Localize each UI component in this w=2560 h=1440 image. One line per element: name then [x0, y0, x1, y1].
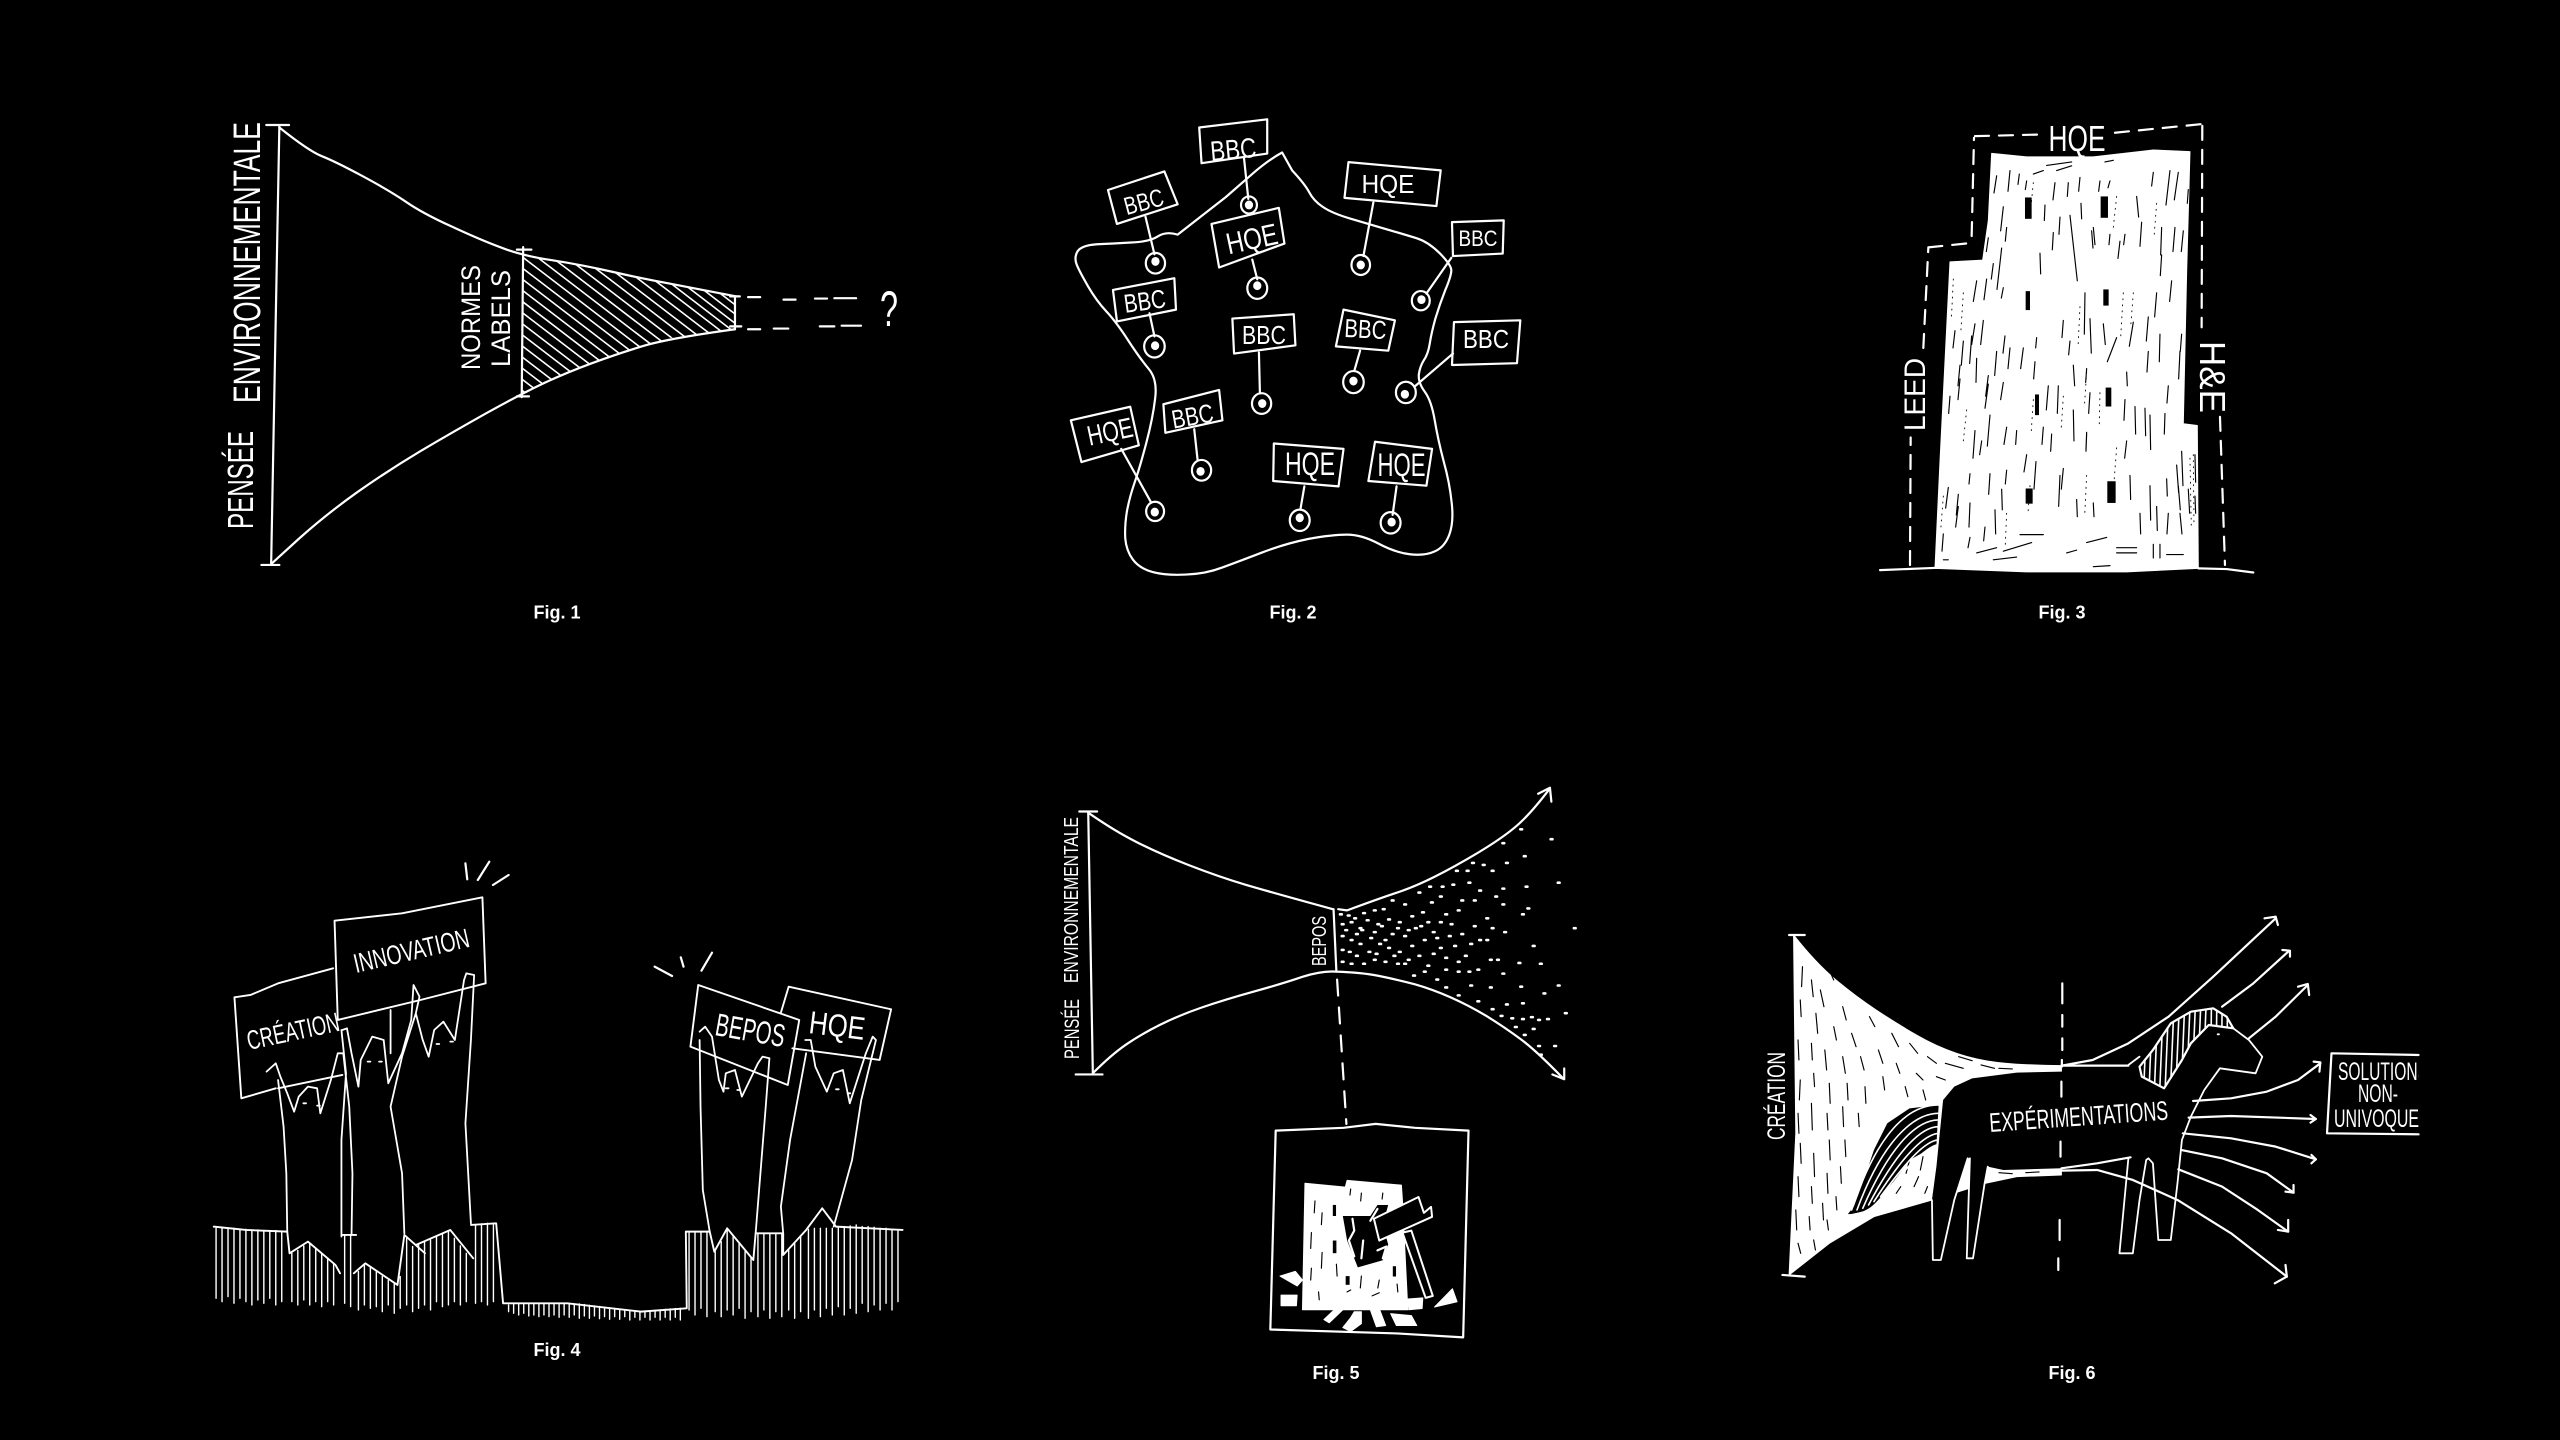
- grass: [216, 1223, 898, 1320]
- textured creation funnel: [1789, 935, 2061, 1275]
- sketch: [1782, 917, 2419, 1283]
- sign: innovation: [335, 897, 486, 1020]
- sign labels: BBC: [1121, 184, 1167, 221]
- inset box: [1270, 1124, 1469, 1337]
- label: hqe: HQE: [807, 1004, 867, 1047]
- sign pins: [1071, 119, 1520, 534]
- box text: solutions non-univoques: NON-: [2358, 1080, 2398, 1108]
- caption: fig 6: Fig. 6: [2048, 1363, 2096, 1383]
- sign labels: BBC: [1344, 313, 1387, 345]
- map outline: [1071, 119, 1520, 575]
- solutions box: [2327, 1053, 2419, 1134]
- centre dashed line: [2058, 983, 2062, 1270]
- sign labels: HQE: [1378, 447, 1426, 483]
- sign: création: [234, 968, 342, 1098]
- caption: fig 4: Fig. 4: [533, 1340, 581, 1360]
- label: LEED: LEED: [1899, 358, 1932, 431]
- label: H&E: H&E: [2192, 341, 2233, 413]
- sign labels: BBC: [1458, 226, 1498, 251]
- diverging arrows: [2061, 917, 2320, 1283]
- speckle: [1941, 183, 2194, 544]
- label: labels: LABELS: [486, 270, 516, 367]
- demolished building: [1302, 1180, 1408, 1310]
- sign labels: BBC: [1242, 320, 1286, 350]
- label: innovation: INNOVATION: [351, 923, 472, 979]
- sign: bepos: [690, 985, 799, 1085]
- sign labels: HQE: [1084, 412, 1136, 452]
- label: pensée: PENSÉE: [220, 431, 261, 529]
- label: pensée: PENSÉE: [1061, 999, 1084, 1059]
- panel: figure 3 textured building: [1880, 118, 2253, 622]
- box text: solutions non-univoques: [2335, 1062, 2419, 1132]
- label: HQE: HQE: [2048, 118, 2106, 159]
- sign: hqe: [781, 987, 891, 1060]
- horse body: [1932, 1008, 2262, 1260]
- sketch: [214, 862, 903, 1320]
- panel: figure 6 funnel, horse and diverging arrows: [1762, 917, 2428, 1383]
- sign labels: BBC: [1122, 283, 1168, 319]
- box text: solutions non-univoques: UNIVOQUE: [2334, 1105, 2419, 1133]
- funnel drawing: [261, 125, 914, 565]
- label: normes: NORMES: [456, 265, 486, 370]
- sketch: [1076, 788, 1576, 1337]
- sign labels: HQE: [1223, 218, 1281, 261]
- caption: fig 3: Fig. 3: [2038, 602, 2086, 622]
- box text: solutions non-univoques: SOLUTIONS: [2338, 1058, 2428, 1086]
- stipple: [1340, 829, 1576, 1055]
- label: expérimentations: EXPÉRIMENTATIONS: [1988, 1096, 2169, 1138]
- panel: figure 4 people holding signs in grass: [214, 862, 903, 1360]
- sign labels: BBC: [1463, 324, 1509, 354]
- sign labels: HQE: [1362, 169, 1414, 199]
- label: bepos: BEPOS: [1309, 916, 1331, 966]
- panel: figure 2 map of France with labels: [1071, 119, 1520, 623]
- bow-tie lines and arrows: [1076, 812, 1102, 1074]
- caption: fig 2: Fig. 2: [1269, 602, 1317, 622]
- sparks: [465, 862, 712, 976]
- label: création: CRÉATION: [244, 1007, 342, 1056]
- panel: figure 1 narrowing funnel: [220, 122, 914, 622]
- sign labels: [1084, 132, 1509, 483]
- funnel ticks: [1782, 935, 1805, 1277]
- sign labels: BBC: [1209, 132, 1257, 167]
- label: environnementale: ENVIRONNEMENTALE: [227, 122, 269, 403]
- label: création: CRÉATION: [1762, 1052, 1791, 1140]
- label: environnementale: ENVIRONNEMENTALE: [1061, 817, 1083, 983]
- building and dashed envelope: [1880, 124, 2253, 573]
- people: [267, 973, 876, 1237]
- tail: [1847, 1105, 1939, 1215]
- question mark: ?: [880, 281, 898, 337]
- caption: fig 5: Fig. 5: [1312, 1363, 1360, 1383]
- sign labels: BBC: [1169, 398, 1216, 435]
- panel: figure 5 bow-tie diagram with demolished building: [1061, 788, 1576, 1383]
- sign labels: HQE: [1285, 446, 1335, 482]
- debris: [1280, 1271, 1457, 1331]
- hammer: [1402, 1231, 1433, 1298]
- caption: fig 1: Fig. 1: [533, 602, 581, 622]
- horse outline: [1932, 1028, 2262, 1260]
- label: bepos: BEPOS: [713, 1006, 788, 1054]
- mane: [2143, 1010, 2228, 1086]
